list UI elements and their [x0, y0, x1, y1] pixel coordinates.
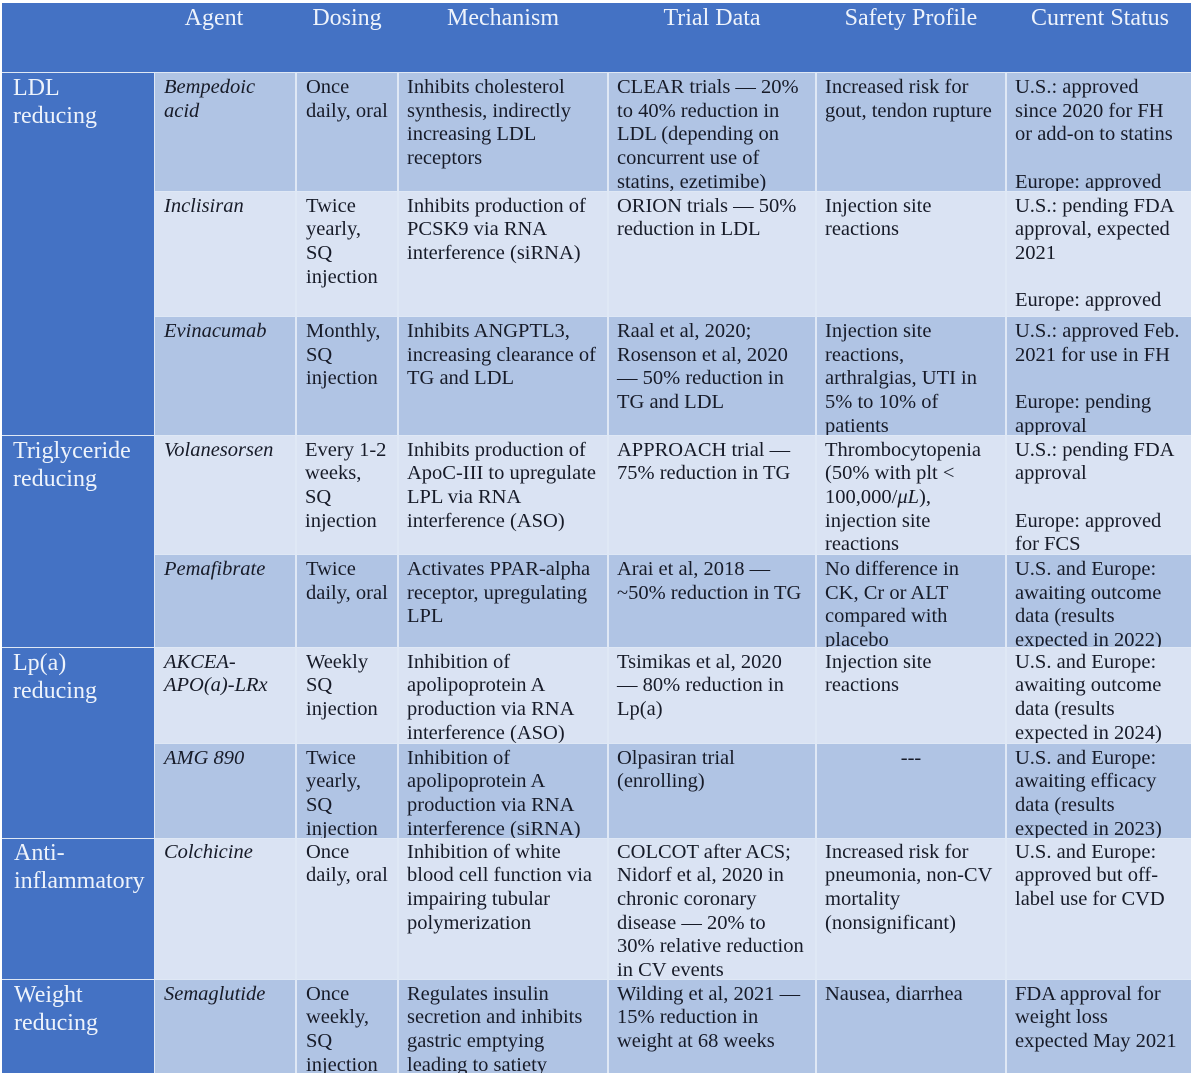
agent: Pemafibrate — [164, 558, 265, 580]
mechanism — [399, 839, 607, 979]
dosing — [297, 648, 397, 743]
current status: Europe: pending — [1015, 391, 1151, 413]
mechanism: Inhibition of — [407, 650, 510, 672]
dosing — [297, 839, 397, 979]
trial data: Nidorf et al, 2020 in — [617, 864, 784, 886]
mechanism — [399, 73, 607, 191]
safety profile: mortality — [825, 888, 900, 910]
safety profile — [817, 980, 1005, 1073]
current status: approved but off- — [1015, 864, 1158, 886]
current status: awaiting efficacy — [1015, 770, 1156, 792]
safety profile: compared with — [825, 605, 947, 627]
mechanism: receptor, upregulating — [407, 582, 587, 604]
trial data — [609, 436, 815, 554]
trial data: to 40% reduction in — [617, 100, 779, 122]
category: Weight reducing — [2, 980, 154, 1073]
safety profile: 5% to 10% of — [825, 391, 938, 413]
current status: 2021 — [1015, 242, 1056, 264]
dosing: Once — [306, 840, 349, 862]
row: Inclisiran — [164, 194, 1174, 311]
trial data: chronic coronary — [617, 888, 756, 910]
safety profile: reactions — [825, 674, 899, 696]
agent: Bempedoic — [164, 76, 255, 98]
trial data: concurrent use of — [617, 147, 759, 169]
mechanism: Inhibits ANGPTL3, — [407, 320, 570, 342]
current status: U.S. and Europe: — [1015, 746, 1156, 768]
category: Lp(a) reducing: reducing — [13, 678, 97, 704]
current status — [1007, 744, 1191, 838]
mechanism: impairing tubular — [407, 888, 550, 910]
dosing: Every 1-2 — [305, 438, 386, 460]
current status: U.S.: approved Feb. — [1015, 320, 1180, 342]
current status: approval — [1015, 462, 1087, 484]
mechanism: polymerization — [407, 912, 531, 934]
dosing: Once — [306, 982, 349, 1004]
trial data: Tsimikas et al, 2020 — [617, 650, 782, 672]
mechanism: Inhibition of white — [407, 840, 561, 862]
agent — [155, 192, 295, 316]
dosing: Twice — [306, 746, 356, 768]
dosing: injection — [306, 266, 378, 288]
mechanism: Inhibits cholesterol — [407, 76, 565, 98]
safety profile: pneumonia, non-CV — [825, 864, 992, 886]
row: Volanesorsen — [164, 438, 1174, 554]
safety profile: reactions, — [825, 344, 904, 366]
mechanism: LPL — [407, 605, 443, 627]
current status: U.S. and Europe: — [1015, 558, 1156, 580]
agent — [155, 436, 295, 554]
dosing: SQ — [305, 486, 331, 508]
mechanism: increasing clearance of — [407, 344, 596, 366]
current status — [1007, 436, 1191, 554]
row: Bempedoic acid — [155, 73, 1191, 191]
trial data: APPROACH trial — — [617, 438, 790, 460]
dosing: SQ — [306, 242, 332, 264]
safety profile: --- — [901, 746, 921, 768]
safety profile: 100,000/μL), — [825, 486, 931, 508]
safety profile: Injection site — [825, 320, 931, 342]
agent — [155, 648, 295, 743]
safety profile: Increased risk for — [825, 840, 968, 862]
current status: U.S.: approved — [1015, 76, 1139, 98]
dosing: SQ — [306, 1030, 332, 1052]
trial data: Rosenson et al, 2020 — [617, 344, 788, 366]
trial data — [609, 317, 815, 435]
agent: AKCEA- — [164, 650, 236, 672]
category: Triglyceride reducing — [2, 436, 154, 647]
header row — [2, 3, 1191, 72]
trial data: disease — 20% to — [617, 912, 766, 934]
dosing: SQ — [306, 674, 332, 696]
current status: U.S. and Europe: — [1015, 840, 1156, 862]
dosing: injection — [306, 367, 378, 389]
current status — [1007, 317, 1191, 435]
agent — [155, 73, 295, 191]
safety profile: Injection site — [825, 194, 931, 216]
mechanism: TG and LDL — [407, 367, 514, 389]
trial data: Raal et al, 2020; — [617, 320, 751, 342]
category: Anti-inflammatory — [2, 839, 154, 979]
current status — [1007, 980, 1191, 1073]
mechanism: gastric emptying — [407, 1030, 544, 1052]
dosing: daily, oral — [306, 582, 388, 604]
safety profile — [817, 436, 1005, 554]
mechanism — [399, 192, 607, 316]
trial data: ORION trials — 50% — [617, 194, 796, 216]
mechanism: Regulates insulin — [407, 982, 549, 1004]
mechanism: interference (ASO) — [407, 722, 565, 743]
column header: Trial Data: Trial Data — [663, 5, 761, 31]
mechanism: receptors — [407, 147, 482, 169]
mechanism: Inhibits production of — [407, 194, 586, 216]
agent: AMG 890 — [164, 746, 244, 768]
safety profile: gout, tendon rupture — [825, 100, 992, 122]
category: LDL reducing: reducing — [13, 103, 97, 129]
safety profile: (50% with plt < — [825, 462, 954, 484]
row: Semaglutide — [155, 980, 1191, 1073]
current status: label use for CVD — [1015, 888, 1165, 910]
trial data: — 50% reduction in — [617, 367, 784, 389]
dosing — [297, 980, 397, 1073]
mechanism: apolipoprotein A — [407, 674, 545, 696]
current status: U.S.: pending FDA — [1015, 194, 1174, 216]
column header: Agent: Agent — [185, 5, 243, 31]
safety profile: Thrombocytopenia — [825, 438, 981, 460]
safety profile: CK, Cr or ALT — [825, 582, 948, 604]
current status: data (results — [1015, 605, 1115, 627]
safety profile — [817, 648, 1005, 743]
category: Triglyceride reducing: Triglyceride — [13, 438, 131, 464]
dosing: yearly, — [306, 770, 361, 792]
agent: Volanesorsen — [164, 438, 273, 460]
current status — [1007, 648, 1191, 743]
category: Triglyceride reducing: reducing — [13, 466, 97, 492]
trial data — [609, 73, 815, 191]
current status — [1007, 73, 1191, 191]
trial data: LDL (depending on — [617, 123, 779, 145]
dosing — [297, 317, 397, 435]
mechanism: Activates PPAR-alpha — [407, 558, 590, 580]
column header: Mechanism: Mechanism — [447, 5, 559, 31]
current status: awaiting outcome — [1015, 674, 1161, 696]
trial data: 15% reduction in — [617, 1006, 758, 1028]
category: Anti-inflammatory: inflammatory — [14, 868, 145, 894]
safety profile — [817, 317, 1005, 435]
mechanism: LPL via RNA — [407, 486, 521, 508]
trial data — [609, 648, 815, 743]
safety profile: Nausea, diarrhea — [825, 982, 963, 1004]
dosing: SQ — [306, 794, 332, 816]
agent: acid — [164, 100, 199, 122]
trial data: 75% reduction in TG — [617, 462, 790, 484]
dosing: yearly, — [306, 218, 361, 240]
dosing: SQ — [306, 344, 332, 366]
trial data: Wilding et al, 2021 — — [617, 982, 800, 1004]
safety profile — [817, 192, 1005, 316]
trial data — [609, 980, 815, 1073]
dosing: daily, oral — [306, 864, 388, 886]
dosing: Monthly, — [306, 320, 380, 342]
agent: Semaglutide — [164, 982, 265, 1004]
mechanism — [399, 436, 607, 554]
row: Pemafibrate — [155, 555, 1191, 647]
safety profile: (nonsignificant) — [825, 912, 956, 934]
column header: Dosing: Dosing — [312, 5, 382, 31]
agent — [155, 744, 295, 838]
row: Evinacumab — [155, 317, 1191, 435]
mechanism: synthesis, indirectly — [407, 100, 571, 122]
dosing — [297, 555, 397, 647]
dosing: daily, oral — [306, 100, 388, 122]
trial data: ~50% reduction in TG — [617, 582, 801, 604]
dosing — [297, 436, 397, 554]
dosing: Twice — [306, 194, 356, 216]
mechanism: secretion and inhibits — [407, 1006, 582, 1028]
dosing — [297, 73, 397, 191]
mechanism — [399, 317, 607, 435]
mechanism: production via RNA — [407, 698, 574, 720]
dosing: weekly, — [306, 1006, 369, 1028]
mechanism: ApoC-III to upregulate — [407, 462, 596, 484]
agent: Evinacumab — [164, 320, 266, 342]
row: AKCEA-APO(a)-LRx — [162, 650, 1162, 743]
trial data: 30% relative reduction — [617, 935, 804, 957]
current status: since 2020 for FH — [1015, 100, 1164, 122]
mechanism: blood cell function via — [407, 864, 592, 886]
agent — [155, 980, 295, 1073]
current status — [1007, 555, 1191, 647]
row: Colchicine — [164, 840, 1165, 979]
safety profile: reactions — [825, 218, 899, 240]
category: Weight reducing: Weight — [14, 982, 83, 1008]
safety profile: No difference in — [825, 558, 959, 580]
agent: Inclisiran — [164, 194, 244, 216]
safety profile — [817, 73, 1005, 191]
current status: FDA approval for — [1015, 982, 1161, 1004]
dosing: Weekly — [306, 650, 368, 672]
safety profile — [817, 839, 1005, 979]
dosing: Once — [306, 76, 349, 98]
trial data: TG and LDL — [617, 391, 724, 413]
current status: 2021 for use in FH — [1015, 344, 1170, 366]
column header: Safety Profile: Safety Profile — [845, 5, 977, 31]
safety profile — [817, 744, 1005, 838]
agent — [155, 839, 295, 979]
trial data — [609, 192, 815, 316]
dosing — [297, 744, 397, 838]
current status: weight loss — [1015, 1006, 1108, 1028]
mechanism: Inhibition of — [407, 746, 510, 768]
trial data — [609, 839, 815, 979]
agent: APO(a)-LRx — [164, 674, 268, 696]
trial data: — 80% reduction in — [617, 674, 784, 696]
current status: data (results — [1015, 794, 1115, 816]
category: LDL reducing: LDL — [13, 75, 60, 101]
safety profile: Injection site — [825, 650, 931, 672]
mechanism: increasing LDL — [407, 123, 536, 145]
trial data: CLEAR trials — 20% — [617, 76, 799, 98]
current status: data (results — [1015, 698, 1115, 720]
trial data: Arai et al, 2018 — — [617, 558, 770, 580]
mechanism — [399, 744, 607, 838]
current status: U.S.: pending FDA — [1015, 438, 1174, 460]
mechanism: interference (ASO) — [407, 510, 565, 532]
dosing: weeks, — [305, 462, 361, 484]
current status: expected May 2021 — [1015, 1030, 1177, 1052]
dosing: injection — [305, 510, 377, 532]
trial data — [609, 555, 815, 647]
trial data: Lp(a) — [617, 698, 663, 720]
trial data: weight at 68 weeks — [617, 1030, 775, 1052]
trial data: COLCOT after ACS; — [617, 840, 791, 862]
safety profile: Increased risk for — [825, 76, 968, 98]
mechanism: Inhibits production of — [407, 438, 586, 460]
dosing — [297, 192, 397, 316]
trial data: reduction in LDL — [617, 218, 760, 240]
mechanism: PCSK9 via RNA — [407, 218, 547, 240]
mechanism — [399, 648, 607, 743]
current status — [1007, 839, 1191, 979]
row: AMG 890 — [155, 744, 1191, 838]
mechanism — [399, 980, 607, 1073]
current status: expected in 2024) — [1015, 722, 1162, 743]
safety profile: arthralgias, UTI in — [825, 367, 977, 389]
agent — [155, 317, 295, 435]
dosing: injection — [306, 698, 378, 720]
mechanism: production via RNA — [407, 794, 574, 816]
column header: Current Status: Current Status — [1031, 5, 1169, 31]
mechanism: apolipoprotein A — [407, 770, 545, 792]
safety profile — [817, 555, 1005, 647]
current status — [1007, 192, 1191, 316]
current status: Europe: approved — [1015, 510, 1161, 532]
current status: U.S. and Europe: — [1015, 650, 1156, 672]
category: Lp(a) reducing: Lp(a) — [13, 650, 66, 676]
dosing: Twice — [306, 558, 356, 580]
agent — [155, 555, 295, 647]
current status: or add-on to statins — [1015, 123, 1173, 145]
trial data — [609, 744, 815, 838]
agent: Colchicine — [164, 840, 253, 862]
mechanism: interference (siRNA) — [407, 242, 581, 264]
category: Lp(a) reducing — [2, 648, 154, 838]
current status: Europe: approved — [1015, 289, 1161, 311]
current status: approval, expected — [1015, 218, 1170, 240]
safety profile: injection site — [825, 510, 930, 532]
category: Weight reducing: reducing — [14, 1010, 98, 1036]
trial data: (enrolling) — [617, 770, 705, 792]
mechanism — [399, 555, 607, 647]
trial data: Olpasiran trial — [617, 746, 735, 768]
category: LDL reducing — [2, 73, 154, 435]
category: Anti-inflammatory: Anti- — [14, 840, 65, 866]
current status: awaiting outcome — [1015, 582, 1161, 604]
